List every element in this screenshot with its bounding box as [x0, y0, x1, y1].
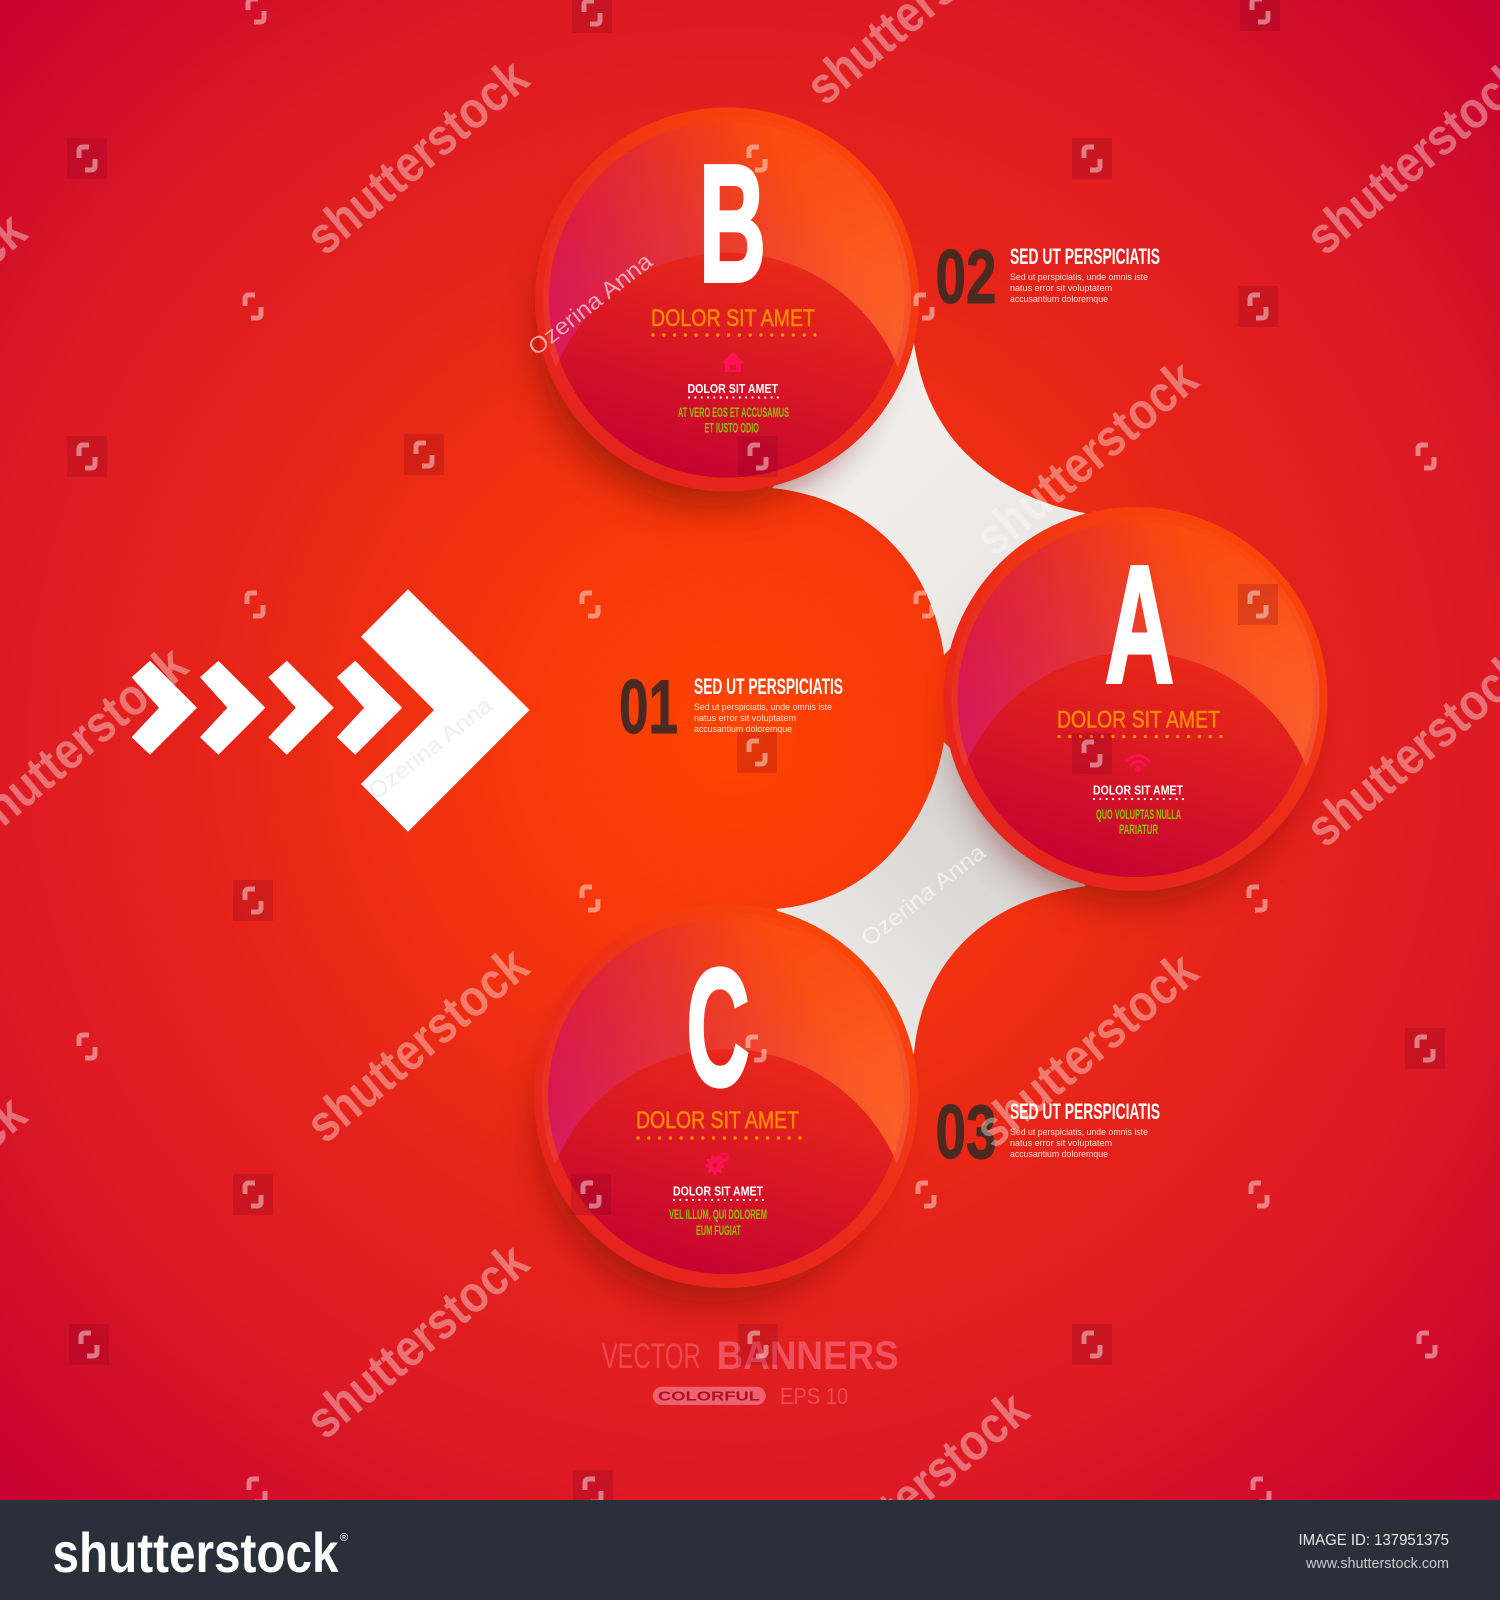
- green text B: ET IUSTO ODIO: [704, 420, 759, 436]
- green text B: [678, 405, 789, 436]
- step 02: [936, 235, 1160, 320]
- vector banners title: VECTOR: [602, 1337, 701, 1376]
- watermark layer: shutterstock: [295, 1232, 539, 1450]
- step 01: Sed ut perspiciatis, unde omnis iste: [694, 702, 832, 713]
- watermark layer: shutterstock: [964, 349, 1208, 567]
- watermark layer: shutterstock: [295, 48, 539, 266]
- watermark layer: shutterstock: [295, 936, 539, 1154]
- circle A: [944, 507, 1328, 891]
- footer bar: ®: [340, 1532, 348, 1544]
- step 02: accusantium doloremque: [1010, 294, 1108, 305]
- white star: upper: [772, 343, 1085, 655]
- website: www.shutterstock.com: [1305, 1555, 1449, 1572]
- watermark layer: Ozerina Anna: [856, 838, 990, 951]
- icon: house: [722, 352, 744, 372]
- heading A: DOLOR SIT AMET: [1057, 706, 1220, 734]
- step 02: 02: [936, 235, 996, 320]
- footer bar: [0, 1500, 1500, 1600]
- letter B: B: [699, 131, 766, 317]
- eps label: EPS 10: [780, 1383, 848, 1409]
- vector banners title: COLORFUL: [658, 1388, 760, 1404]
- step 01: natus error sit voluptatem: [694, 713, 796, 724]
- icon: gears: [707, 1154, 728, 1173]
- watermark layer: Ozerina Anna: [523, 247, 657, 360]
- step 01: 01: [619, 665, 678, 750]
- label C: DOLOR SIT AMET: [673, 1184, 763, 1198]
- colorful badge: [653, 1387, 766, 1405]
- watermark layer: Ozerina Anna: [363, 691, 497, 804]
- large chevron: [361, 589, 530, 832]
- step 02: natus error sit voluptatem: [1010, 283, 1112, 294]
- circle B: [535, 108, 919, 492]
- step 03: 03: [936, 1090, 996, 1175]
- step 03: accusantium doloremque: [1010, 1149, 1108, 1160]
- step 03: SED UT PERSPICIATIS: [1010, 1099, 1160, 1124]
- step 01: accusantium doloremque: [694, 724, 792, 735]
- white star: lower: [776, 742, 1086, 1054]
- letter A: A: [1105, 532, 1174, 718]
- vector banners title: BANNERS: [717, 1334, 899, 1378]
- green text A: [1096, 807, 1181, 837]
- step 01: SED UT PERSPICIATIS: [694, 674, 843, 699]
- step 03: Sed ut perspiciatis, unde omnis iste: [1010, 1127, 1148, 1138]
- letter C: C: [686, 935, 750, 1121]
- step 02: SED UT PERSPICIATIS: [1010, 244, 1160, 269]
- heading B: DOLOR SIT AMET: [651, 305, 815, 332]
- heading C: DOLOR SIT AMET: [636, 1107, 799, 1134]
- step 03: [936, 1090, 1160, 1175]
- step 03: natus error sit voluptatem: [1010, 1138, 1112, 1149]
- vector banners title: [602, 1334, 899, 1409]
- green text C: [669, 1207, 767, 1238]
- green text C: VEL ILLUM, QUI DOLOREM: [669, 1207, 767, 1222]
- circle C: [534, 904, 918, 1288]
- footer logo: shutterstock: [52, 1521, 339, 1584]
- circle shadows: [539, 162, 1305, 1302]
- small chevrons: [132, 661, 402, 755]
- image id: IMAGE ID: 137951375: [1298, 1532, 1449, 1549]
- green text B: AT VERO EOS ET ACCUSAMUS: [678, 405, 789, 420]
- step 02: Sed ut perspiciatis, unde omnis iste: [1010, 272, 1148, 283]
- watermark layer: shutterstock: [795, 1380, 1039, 1598]
- green text A: PARIATUR: [1119, 822, 1158, 837]
- icon: wifi: [1127, 756, 1149, 771]
- step 01: [619, 665, 843, 750]
- label B: DOLOR SIT AMET: [688, 381, 778, 396]
- arrow group: [132, 589, 530, 832]
- green text C: EUM FUGIAT: [696, 1223, 741, 1238]
- green text A: QUO VOLUPTAS NULLA: [1096, 807, 1181, 822]
- watermark layer: shutterstock: [964, 941, 1208, 1159]
- label A: DOLOR SIT AMET: [1093, 782, 1183, 798]
